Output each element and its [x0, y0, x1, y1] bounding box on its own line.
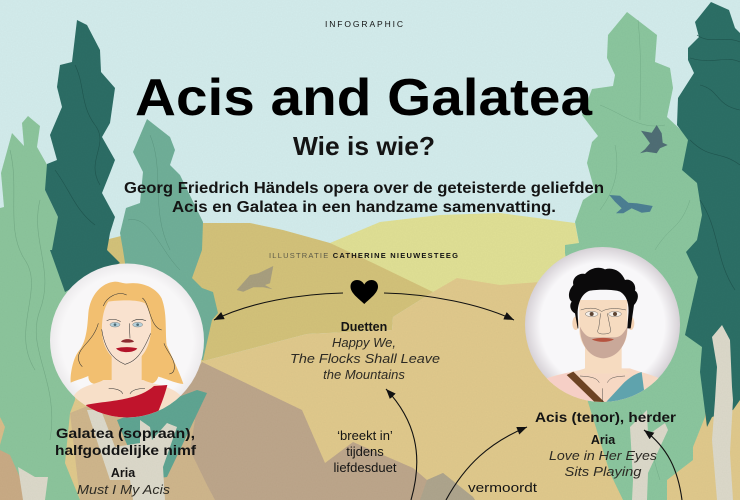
duets text: Happy We, — [332, 335, 396, 350]
duets text — [290, 320, 440, 382]
arm skin — [547, 368, 658, 402]
tree: left dark green — [45, 20, 120, 292]
hair and face lines — [78, 294, 174, 394]
annotation: breekt in — [334, 428, 397, 475]
hair — [71, 282, 183, 384]
beard — [580, 327, 627, 358]
portrait: Galatea — [50, 264, 204, 420]
dress — [86, 385, 167, 420]
nose — [121, 339, 134, 343]
arrow: to Acis — [446, 427, 527, 500]
caption: Acis: Acis (tenor), herder — [535, 409, 677, 425]
chest — [73, 380, 180, 420]
illustrator credit: ILLUSTRATIE CATHERINE NIEUWESTEEG — [269, 251, 458, 260]
intro text — [124, 180, 604, 216]
hair — [569, 268, 638, 328]
portrait: Acis — [525, 247, 680, 407]
caption: Acis: Love in Her Eyes — [549, 448, 658, 463]
caption: Acis: Sits Playing — [564, 464, 642, 479]
icon: heart — [350, 280, 378, 304]
bird: upper right — [640, 125, 668, 153]
neck — [585, 348, 622, 368]
bird: lower right — [609, 195, 653, 213]
ground patch: left edge — [0, 417, 5, 445]
ground patch: bottom left corner — [0, 440, 40, 500]
mouth — [592, 338, 614, 342]
caption: Galatea — [55, 425, 196, 497]
arrow: to Acis aria — [644, 430, 682, 500]
caption: Galatea: Aria — [111, 466, 136, 480]
tree: left light green — [0, 116, 80, 500]
arrow: heart to Acis — [384, 293, 514, 320]
face — [102, 300, 151, 364]
annotation: breekt in: liefdesduet — [334, 460, 397, 475]
duets text: the Mountains — [323, 367, 405, 382]
annotation: breekt in: tijdens — [346, 444, 384, 459]
tree: right light green — [565, 12, 712, 500]
intro text: Georg Friedrich Händels opera over de geteisterde geliefden — [124, 180, 604, 197]
arrow: heart to Galatea — [214, 293, 343, 320]
mouth — [116, 347, 137, 352]
intro text: Acis en Galatea in een handzame samenvatting. — [172, 199, 556, 216]
eyes — [110, 322, 120, 327]
caption: Acis — [535, 409, 677, 479]
eyes — [585, 311, 598, 317]
annotation: breekt in: ‘breekt in’ — [337, 428, 393, 443]
arrow: to duets — [386, 389, 417, 500]
tree: right dark green — [677, 2, 740, 427]
neck — [112, 356, 142, 380]
tree: middle teal green — [117, 119, 218, 480]
ears — [572, 317, 579, 330]
caption: Galatea: Must I My Acis — [77, 482, 171, 497]
title: Acis and Galatea — [135, 69, 593, 127]
duets text: The Flocks Shall Leave — [290, 351, 440, 366]
duets text: Duetten — [341, 320, 387, 334]
bird: hillside — [237, 266, 273, 292]
face — [579, 300, 628, 348]
subtitle: Wie is wie? — [293, 131, 435, 161]
annotation: vermoordt: vermoordt — [468, 480, 537, 495]
cloth — [606, 372, 644, 402]
label: infographic: INFOGRAPHIC — [325, 19, 403, 29]
landscape hills — [60, 213, 740, 500]
tree trunks — [18, 325, 733, 500]
caption: Galatea: halfgoddelijke nimf — [55, 442, 196, 458]
caption: Acis: Aria — [591, 433, 616, 447]
strap — [567, 372, 605, 404]
face lines — [580, 308, 626, 402]
caption: Galatea: Galatea (sopraan), — [56, 425, 195, 441]
